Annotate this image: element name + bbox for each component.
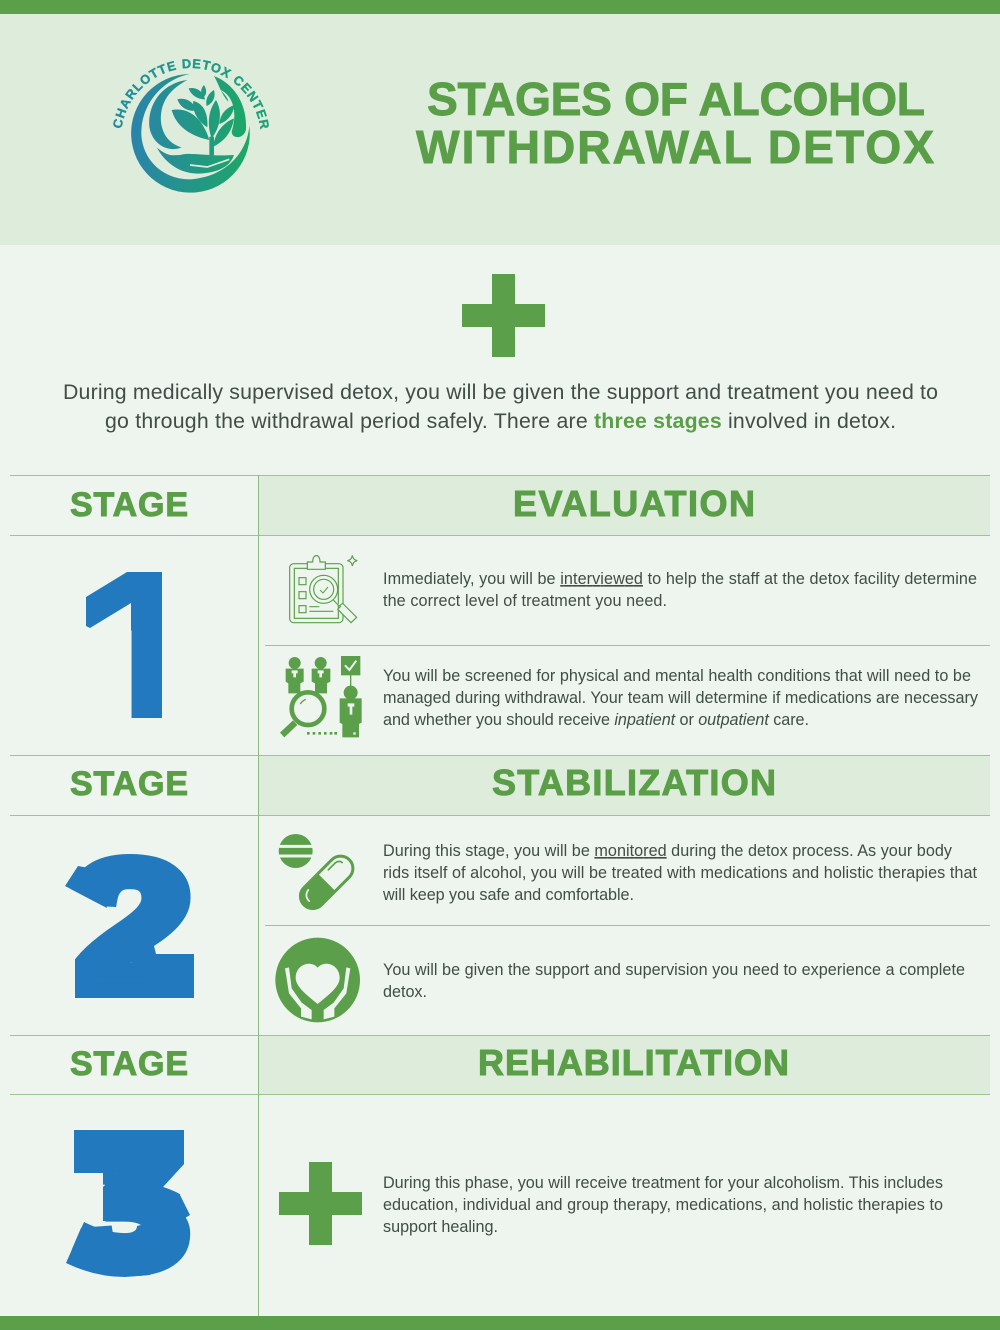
- top bar: [0, 0, 1000, 14]
- text: screening: You will be screened for physical and mental health conditions that will need to be: [383, 667, 971, 685]
- text: screening: managed during withdrawal. Your team will determine if medications are necessary: [383, 689, 979, 707]
- text: interview: the correct level of treatment you need.: [383, 592, 667, 610]
- text: monitoring: rids itself of alcohol, you will be treated with medications and holistic therapies that: [383, 864, 978, 882]
- icon: hands holding heart: [275, 938, 360, 1022]
- numeral 1: [86, 572, 162, 718]
- text: rehabilitation: [383, 1174, 943, 1236]
- heading: stage 3: [70, 1042, 789, 1083]
- text: support: detox.: [383, 983, 427, 1001]
- logo: Charlotte Detox Center: CHARLOTTE DETOX CENTER: [113, 59, 269, 130]
- title: WITHDRAWAL DETOX: [416, 121, 934, 173]
- header band: [0, 14, 1000, 245]
- icon: plus: [279, 1162, 362, 1245]
- text: rehabilitation: education, individual and group therapy, medications, and holistic therapies to: [383, 1196, 943, 1214]
- text: monitoring: [382, 842, 978, 904]
- text: rehabilitation: support healing.: [383, 1218, 498, 1236]
- panel: stage 2: [60, 762, 978, 1030]
- heading: stage 2: STAGE: [70, 765, 188, 803]
- icon: clipboard with magnifier: [290, 555, 357, 623]
- panel: stage 3: [60, 1042, 943, 1307]
- heading: stage 1: [70, 483, 755, 524]
- title: [416, 73, 934, 173]
- table grid: [10, 475, 990, 1316]
- heading: stage 2: [70, 762, 776, 803]
- heading: stage 3: REHABILITATION: [478, 1042, 789, 1083]
- text: monitoring: During this stage, you will be monitored during the detox process. As your body: [383, 842, 953, 860]
- intro text: go through the withdrawal period safely. There are three stages involved in detox.: [105, 409, 896, 433]
- text: monitoring: will keep you safe and comfortable.: [382, 886, 634, 904]
- icon: pill and capsule: [278, 834, 358, 914]
- text: support: You will be given the support and supervision you need to experience a complete: [383, 961, 965, 979]
- heading: stage 3: STAGE: [70, 1045, 188, 1083]
- bottom bar: [0, 1316, 1000, 1330]
- numeral 2: 2: [68, 823, 193, 1030]
- numeral 3: 3: [70, 1107, 190, 1307]
- text: support: [383, 961, 965, 1001]
- panel: stage 1: [70, 490, 978, 738]
- text: screening: and whether you should receive inpatient or outpatient care.: [383, 711, 809, 729]
- intro text: [63, 380, 938, 433]
- text: interview: [383, 570, 977, 610]
- title: STAGES OF ALCOHOL: [427, 73, 925, 125]
- logo: Charlotte Detox Center: [113, 59, 269, 193]
- numeral 1: 1: [99, 538, 188, 803]
- intro text: During medically supervised detox, you will be given the support and treatment you need to: [63, 380, 938, 404]
- heading: stage 2: STABILIZATION: [492, 762, 776, 803]
- heading: stage 1: STAGE: [70, 486, 188, 524]
- text: interview: Immediately, you will be interviewed to help the staff at the detox facility determine: [383, 570, 977, 588]
- icon: people and magnifier: [280, 656, 362, 737]
- icon: plus: [462, 274, 545, 357]
- text: rehabilitation: During this phase, you will receive treatment for your alcoholism. This includes: [383, 1174, 943, 1192]
- heading: stage 1: EVALUATION: [513, 483, 755, 524]
- text: screening: [383, 667, 979, 729]
